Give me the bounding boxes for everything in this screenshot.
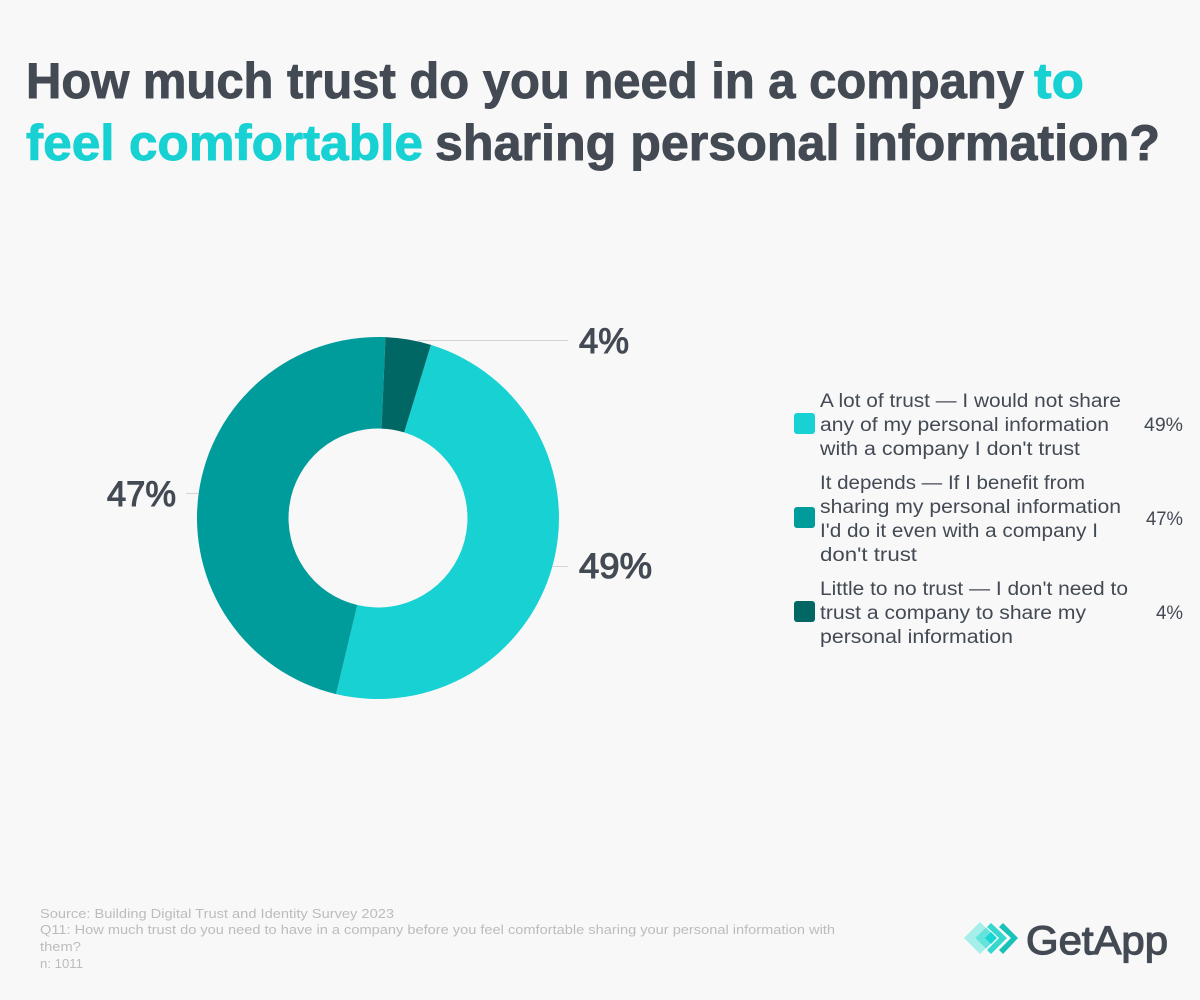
source note: Source: Building Digital Trust and Identity Survey 2023 (40, 906, 394, 921)
leader line: 49% (553, 566, 568, 568)
legend text: little to no trust (820, 579, 1128, 648)
swatch: little to no trust (794, 601, 815, 622)
legend text: it depends: don't trust (820, 545, 918, 566)
leader line: 47% (186, 492, 198, 494)
legend text: it depends: It depends — If I benefit from (820, 473, 1085, 494)
logo: GetApp (964, 919, 1168, 963)
swatch: it depends (794, 507, 815, 528)
data label: 4%: 4% (579, 322, 629, 361)
legend text: a lot of trust: with a company I don't trust (819, 439, 1081, 460)
title: sharing personal information? (435, 115, 1160, 171)
legend item: a lot of trust (794, 391, 1183, 460)
slice: a lot of trust 49% (336, 345, 559, 699)
title: feel comfortable (26, 115, 423, 171)
legend value: 49%: 49% (1144, 415, 1183, 436)
legend text: a lot of trust (819, 391, 1121, 460)
slice: it depends 47% (197, 337, 386, 694)
legend (794, 391, 1183, 648)
legend text: a lot of trust: A lot of trust — I would not share (820, 391, 1121, 412)
legend text: it depends (820, 473, 1121, 566)
legend text: little to no trust: Little to no trust — I don't need to (820, 579, 1128, 600)
source note: them? (40, 939, 81, 954)
icon: GetApp diamonds (964, 922, 1018, 954)
source note: n: 1011 (40, 956, 83, 971)
swatch: a lot of trust (794, 413, 815, 434)
legend value: 4%: 4% (1156, 603, 1183, 624)
donut chart (186, 337, 568, 699)
leader line: 4% (418, 340, 568, 342)
legend text: a lot of trust: any of my personal information (820, 415, 1109, 436)
logo wordmark: GetApp (1026, 919, 1168, 963)
data label: 47%: 47% (107, 475, 176, 514)
legend text: little to no trust: personal information (820, 627, 1013, 648)
legend text: little to no trust: trust a company to share my (820, 603, 1087, 624)
legend text: it depends: I'd do it even with a company I (820, 521, 1098, 542)
title (26, 53, 1160, 171)
legend item: little to no trust (794, 579, 1183, 648)
title: How much trust do you need in a company (26, 53, 1024, 109)
source note (40, 906, 835, 971)
source note: Q11: How much trust do you need to have in a company before you feel comfortable sharing your personal information with (40, 922, 835, 937)
legend value: 47%: 47% (1146, 509, 1183, 530)
slice: little to no trust 4% (382, 337, 431, 432)
data label: 49%: 49% (579, 547, 652, 586)
legend text: it depends: sharing my personal information (820, 497, 1121, 518)
title: to (1034, 53, 1084, 109)
legend item: it depends (794, 473, 1183, 566)
